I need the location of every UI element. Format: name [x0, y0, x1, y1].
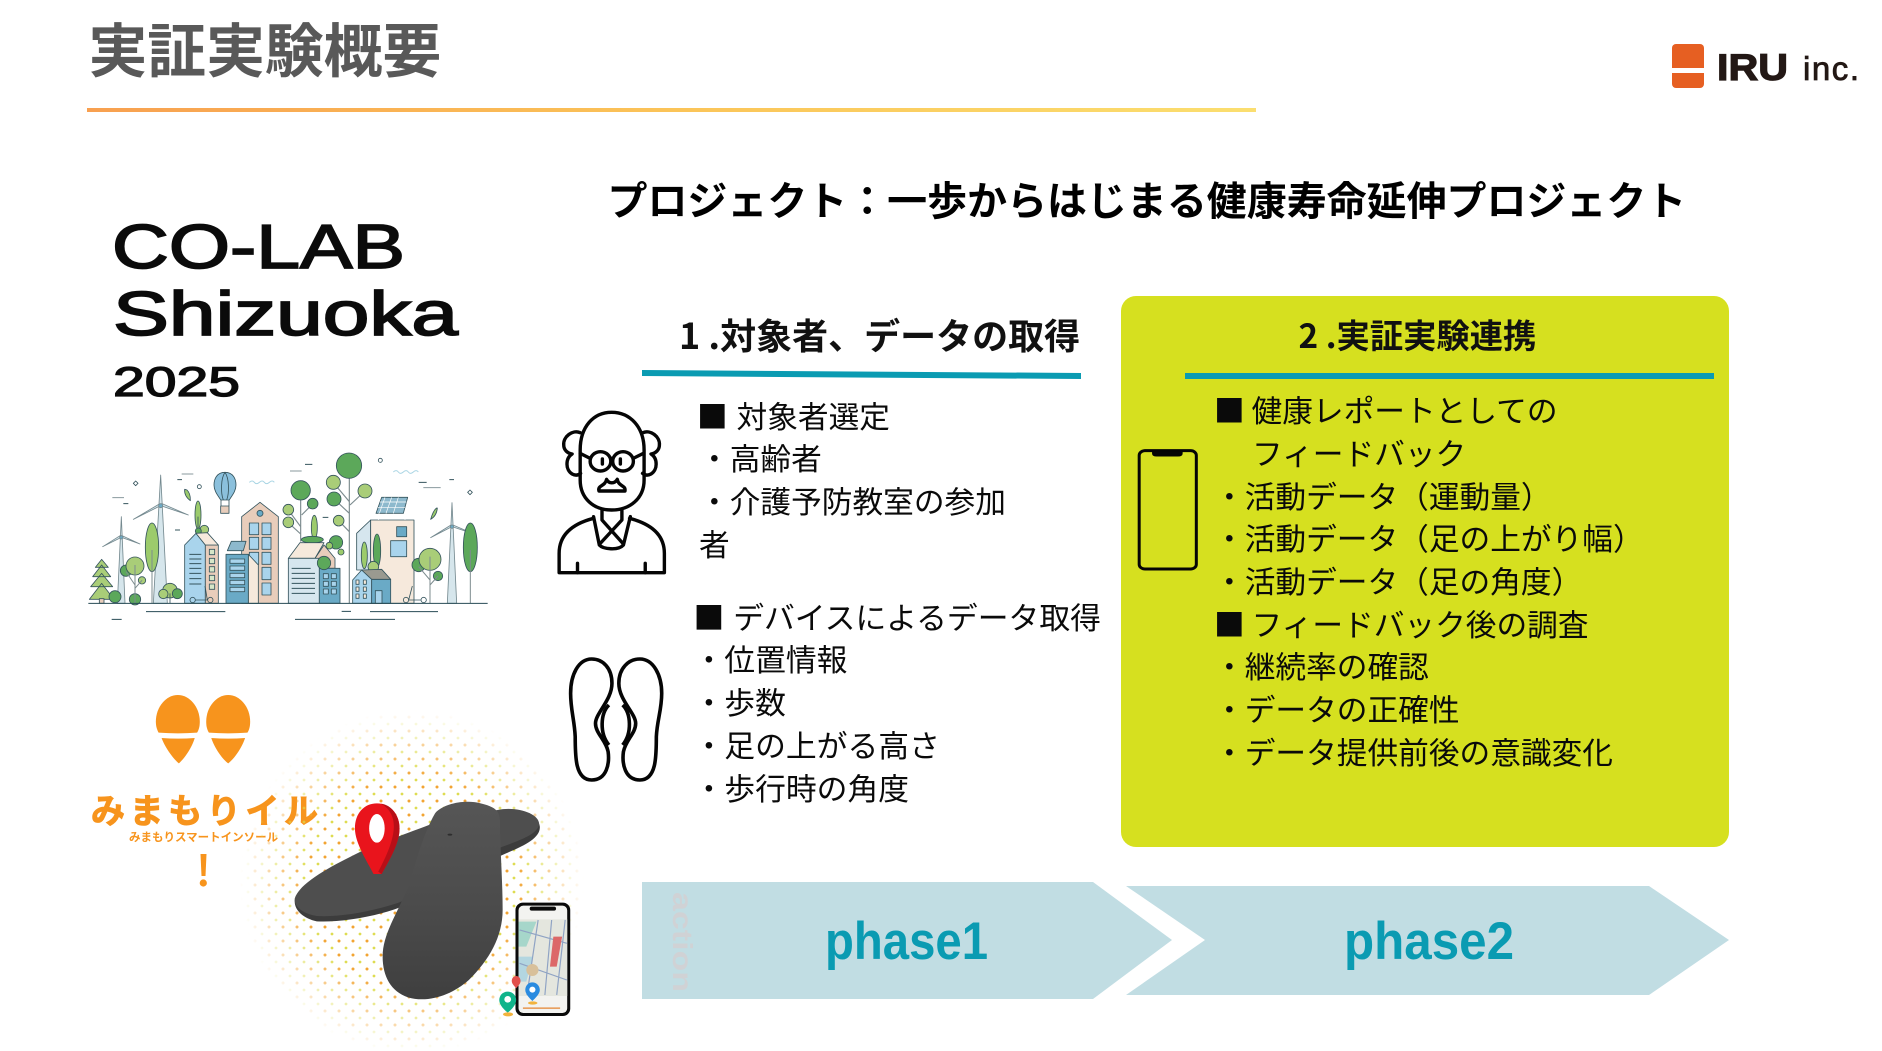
project heading: プロジェクト：一歩からはじまる健康寿命延伸プロジェクト [608, 168, 1686, 226]
icon: smartphone [1138, 449, 1198, 570]
phase 1 label: phase1 [825, 912, 988, 971]
logo: CO-LAB Shizuoka 2025 [112, 213, 460, 405]
section heading 1: 1 .対象者、データの取得 [679, 308, 1080, 360]
logo: CO-LAB Shizuoka 2025: CO-LAB [112, 213, 405, 282]
logo text: IRU [1717, 47, 1788, 88]
icon: footprints [156, 695, 250, 764]
action label: action [667, 892, 698, 992]
panel: phase 2 feedback [1121, 296, 1729, 847]
insole: front [383, 802, 503, 999]
logo: IRU inc. [1672, 44, 1859, 88]
title underline [87, 108, 1266, 112]
map pin: red [355, 803, 400, 874]
text block: health report and survey: ■ 健康レポートとしての フィードバック ・活動データ（運動量） ・活動データ（足の上がり幅） ・活動データ（足の角度） ■ フィードバック後の調査 ・継続率の確認 ・データの正確性 ・データ提供前後の意識変化 [1214, 386, 1644, 773]
phase 2 label: phase2 [1344, 912, 1514, 971]
logo mark [1672, 44, 1704, 88]
buildings [185, 497, 443, 603]
scooters [190, 586, 426, 603]
section 2 underline [1185, 373, 1714, 379]
section heading 2: 2 .実証実験連携 [1298, 308, 1536, 358]
sky marks [112, 458, 472, 530]
trees [89, 453, 477, 605]
logo: mimamori-iru [91, 695, 323, 887]
text block: device data: ■ デバイスによるデータ取得 ・位置情報 ・歩数 ・足の上がる高さ ・歩行時の角度 [694, 592, 1101, 809]
ground lines [88, 603, 488, 619]
illustration: smart insole with phone [246, 716, 578, 1048]
logo text [1717, 47, 1859, 88]
title: 実証実験概要 [88, 4, 441, 88]
hot air balloon [214, 472, 236, 513]
logo text: inc. [1803, 50, 1859, 87]
logo: CO-LAB Shizuoka 2025: 2025 [113, 358, 240, 405]
halftone background [235, 705, 585, 1051]
product subtitle: みまもりスマートインソール [129, 829, 278, 845]
exclamation mark [200, 854, 207, 887]
product name: みまもりイル [91, 784, 323, 832]
phone [515, 903, 570, 1016]
text block: target selection: ■ 対象者選定 ・高齢者 ・介護予防教室の参加 者 [697, 392, 1006, 565]
map pins: small [499, 992, 516, 1013]
wind turbines [103, 475, 474, 603]
logo: CO-LAB Shizuoka 2025: Shizuoka [113, 280, 459, 349]
insole: back [295, 809, 540, 921]
